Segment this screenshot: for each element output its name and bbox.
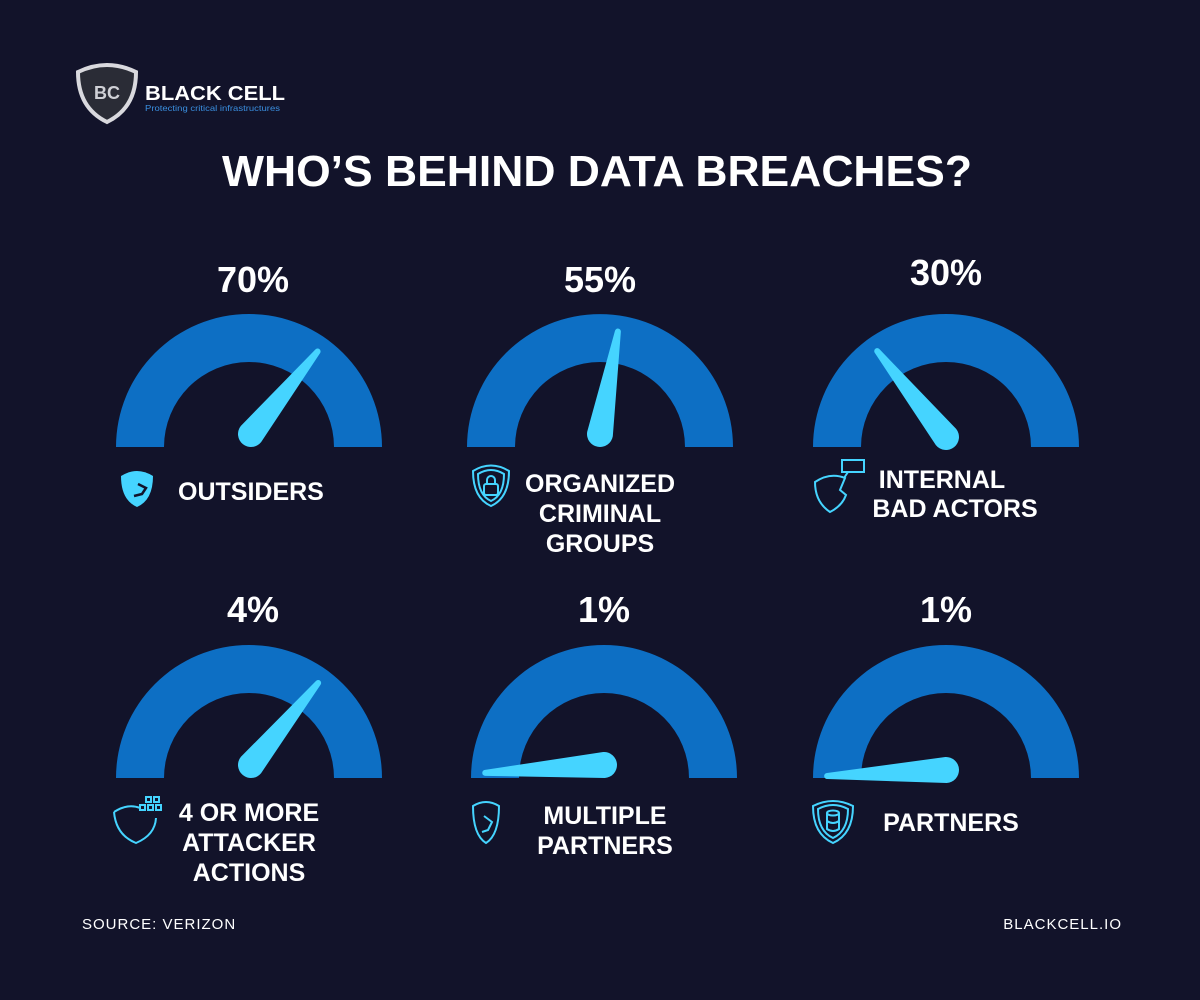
panel: multiple partners xyxy=(471,589,737,860)
logo: BLACK CELL xyxy=(145,83,285,105)
panel: 4 or more attacker actions: 4 OR MORE xyxy=(179,799,319,827)
panel: multiple partners: 1% xyxy=(578,589,630,630)
panel: 4 or more attacker actions: ACTIONS xyxy=(193,859,305,887)
panel: outsiders: OUTSIDERS xyxy=(178,478,324,506)
panel: organized criminal groups: GROUPS xyxy=(546,530,654,558)
logo: BC xyxy=(94,83,120,103)
panel: organized criminal groups: CRIMINAL xyxy=(539,500,661,528)
panel: internal bad actors: 30% xyxy=(910,252,982,293)
panel: partners xyxy=(813,589,1079,843)
panel: partners: PARTNERS xyxy=(883,809,1019,837)
panel: internal bad actors: BAD ACTORS xyxy=(872,495,1038,523)
title: WHO’S BEHIND DATA BREACHES? xyxy=(222,147,972,196)
panel: organized criminal groups: 55% xyxy=(564,259,636,300)
panel: outsiders xyxy=(116,259,382,507)
panel: organized criminal groups xyxy=(467,259,733,558)
source: SOURCE: VERIZON xyxy=(82,916,236,933)
logo xyxy=(78,65,285,122)
panel: partners: 1% xyxy=(920,589,972,630)
panel: 4 or more attacker actions xyxy=(114,589,382,887)
panel: internal bad actors xyxy=(813,252,1079,523)
panel: internal bad actors: INTERNAL xyxy=(879,466,1005,494)
panel: multiple partners: MULTIPLE xyxy=(543,802,667,830)
panel: outsiders: 70% xyxy=(217,259,289,300)
panel: multiple partners: PARTNERS xyxy=(537,832,673,860)
panel: 4 or more attacker actions: 4% xyxy=(227,589,279,630)
website: BLACKCELL.IO xyxy=(1003,916,1122,933)
panel: organized criminal groups: ORGANIZED xyxy=(525,470,675,498)
logo: Protecting critical infrastructures xyxy=(145,103,280,113)
panel: 4 or more attacker actions: ATTACKER xyxy=(182,829,316,857)
